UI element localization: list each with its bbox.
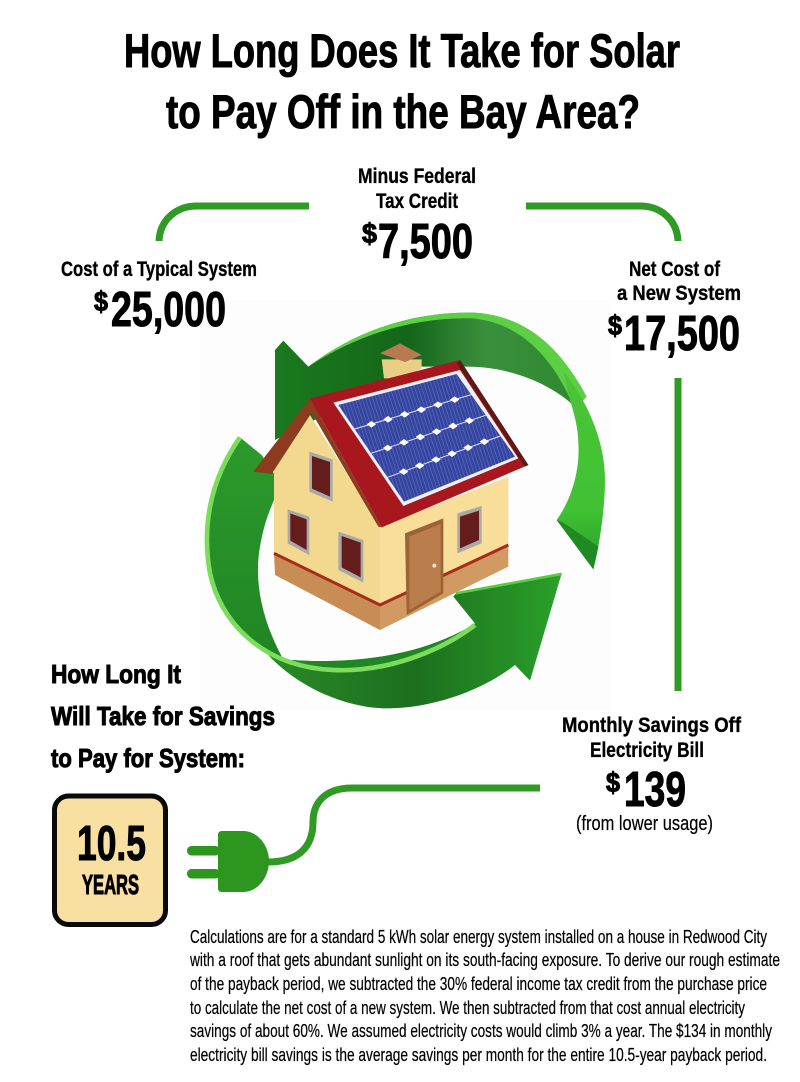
faint image background	[200, 300, 610, 710]
arrow: left	[206, 437, 475, 673]
label: net cost of a new system: $	[608, 310, 622, 341]
title: to Pay Off in the Bay Area?	[166, 85, 640, 138]
label: cost of a typical system: $	[94, 286, 108, 317]
label: monthly savings	[562, 714, 742, 835]
arrow: bottom	[267, 573, 562, 708]
label: net cost of a new system: a New System	[617, 282, 741, 305]
label: minus federal tax credit	[358, 165, 476, 269]
label: how long it will take	[51, 659, 275, 773]
connector: top right green line	[526, 206, 678, 241]
label: monthly savings: (from lower usage)	[576, 813, 713, 835]
arrow: top	[275, 313, 587, 440]
label: how long it will take: to Pay for System:	[51, 743, 245, 773]
connector: right vertical green line	[674, 378, 682, 691]
label: how long it will take: How Long It	[51, 659, 181, 689]
connector: top left green line	[159, 206, 309, 241]
label: minus federal tax credit: Minus Federal	[358, 165, 476, 188]
icon: plug with cord	[187, 788, 540, 892]
label: cost of a typical system: 25,000	[111, 283, 226, 337]
windows	[288, 452, 482, 583]
door	[405, 518, 443, 615]
label: net cost of a new system	[608, 258, 741, 361]
illustration: house with solar panels and recycling arrows	[206, 313, 605, 708]
footnote paragraph	[189, 927, 780, 1065]
arrow: right	[557, 372, 605, 569]
label: how long it will take: Will Take for Savings	[51, 701, 275, 731]
label: monthly savings: Monthly Savings Off	[562, 714, 742, 737]
result box: 10.5 years	[54, 796, 166, 924]
result box: 10.5 years: YEARS	[82, 869, 139, 900]
label: cost of a typical system	[61, 258, 257, 337]
walls	[274, 415, 380, 605]
label: net cost of a new system: 17,500	[624, 307, 740, 361]
roof	[253, 360, 528, 527]
solar panel	[333, 370, 518, 506]
label: cost of a typical system: Cost of a Typical System	[61, 258, 257, 281]
chimney	[380, 343, 422, 378]
house	[253, 343, 528, 630]
label: minus federal tax credit: Tax Credit	[376, 190, 458, 213]
label: monthly savings: Electricity Bill	[590, 739, 704, 762]
label: monthly savings: 139	[624, 763, 686, 817]
label: net cost of a new system: Net Cost of	[629, 258, 721, 281]
result box: 10.5 years: 10.5	[77, 817, 146, 871]
label: monthly savings: $	[606, 767, 620, 798]
label: minus federal tax credit: $	[362, 218, 377, 249]
label: minus federal tax credit: 7,500	[378, 215, 473, 269]
foundation	[274, 545, 508, 630]
title	[124, 24, 680, 138]
